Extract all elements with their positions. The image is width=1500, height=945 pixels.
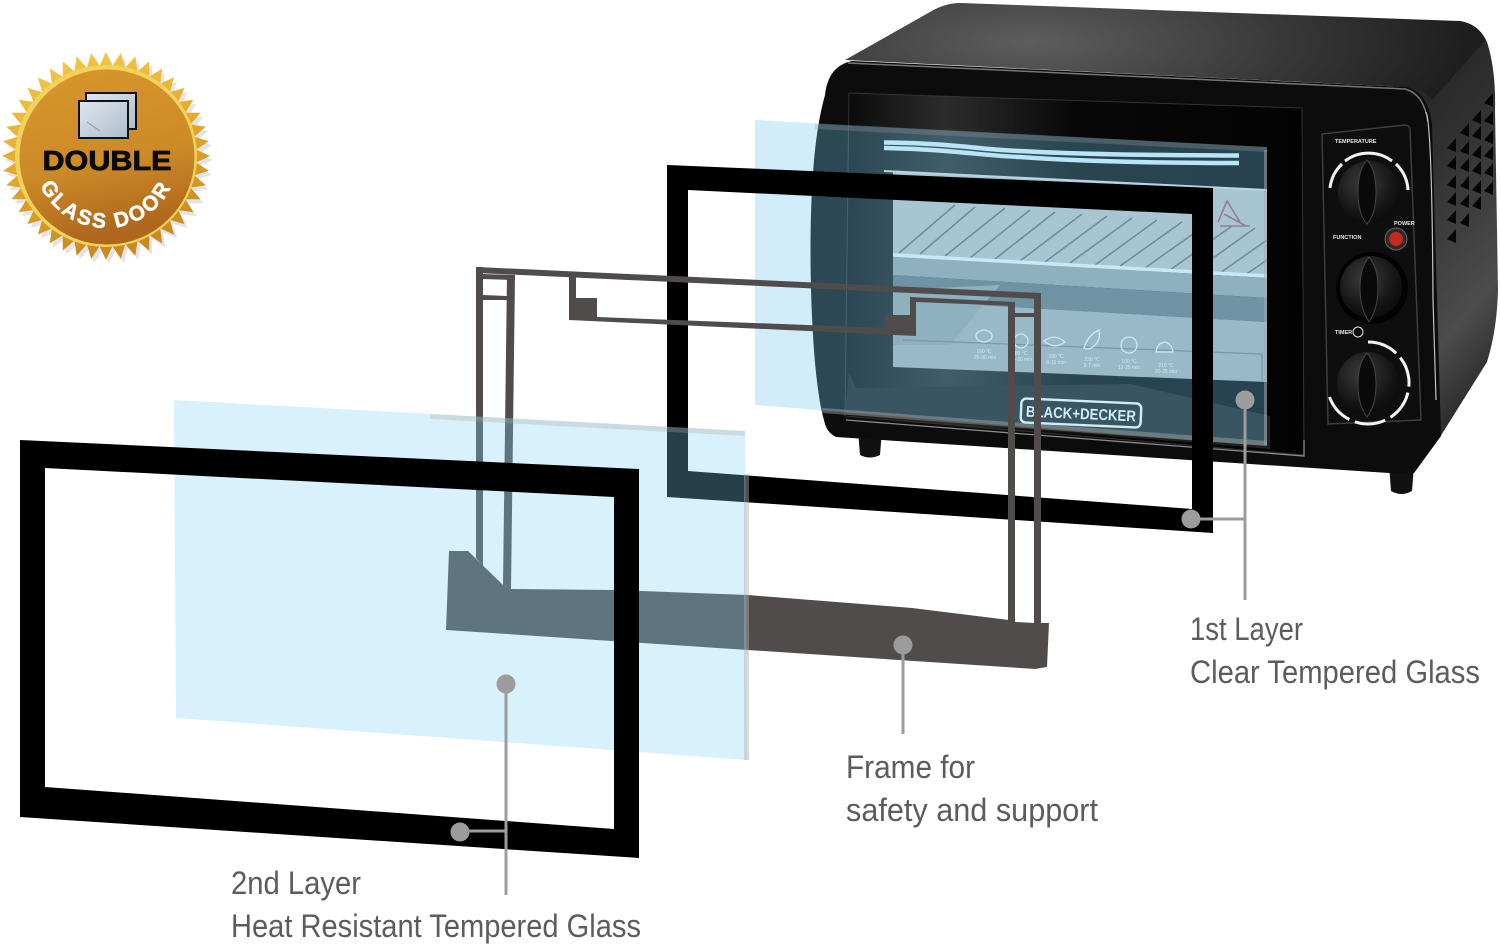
timer icon: [1353, 327, 1363, 337]
temperature dial: [1330, 153, 1408, 224]
oven: [810, 3, 1498, 494]
cooking guide captions: 20-25 min: [1155, 369, 1177, 375]
pointer: 2nd layer: [450, 674, 516, 895]
door lower panel: [845, 372, 1270, 449]
front edge highlights: [848, 63, 1428, 122]
label: 2nd layer: 2nd Layer: [231, 865, 361, 901]
cooking guide captions: 210 °C: [1158, 363, 1174, 369]
power light: [1385, 228, 1407, 250]
label: frame: [846, 749, 1098, 828]
cooking guide captions: 230 °C: [1048, 354, 1064, 360]
label: frame: safety and support: [846, 792, 1098, 828]
frame right uprights and crossbar: [1034, 293, 1041, 625]
label: 1st layer: Clear Tempered Glass: [1190, 654, 1480, 690]
timer label: TIMER: [1335, 330, 1352, 336]
label: frame: Frame for: [846, 749, 975, 785]
oven feet: [858, 430, 1414, 494]
cooking guide captions: 150 °C: [976, 349, 992, 355]
cooking guide captions: 190 °C: [1121, 359, 1137, 365]
badge heading: DOUBLE: [42, 145, 172, 176]
oven side housing: [1380, 21, 1498, 473]
temperature label: TEMPERATURE: [1335, 139, 1377, 145]
cooking guide captions: 25-30 min: [974, 355, 996, 361]
function dial: [1336, 252, 1408, 324]
2nd layer glass pane: [174, 400, 749, 760]
label: 1st layer: [1190, 611, 1480, 690]
vent slots: [1447, 93, 1493, 243]
2nd layer black frame: [20, 440, 639, 858]
frame inner bracket: [569, 273, 1015, 336]
frame outer top rail: [477, 267, 1041, 299]
badge curved text: GLASS DOOR: [42, 181, 172, 228]
1st layer black frame: [667, 165, 1213, 533]
cooking guide captions: 230 °C: [1084, 357, 1100, 363]
cooking guide captions: 20-30 min: [1010, 357, 1032, 363]
1st layer glass pane: [755, 120, 1267, 446]
red rack reflection: [1218, 201, 1250, 226]
label: 2nd layer: [231, 865, 641, 944]
frame left uprights and crossbars: [476, 267, 483, 566]
oven front face: [810, 61, 1441, 473]
wire rack: [893, 205, 1267, 276]
label: 2nd layer: Heat Resistant Tempered Glass: [231, 908, 641, 944]
brand logo: [1021, 398, 1141, 428]
brand logo: BLACK+DECKER: [1026, 404, 1136, 425]
door ledge highlight: [846, 420, 1304, 456]
icon: two glass panes: [79, 93, 136, 138]
cooking guide captions: 3-7 min: [1084, 363, 1101, 369]
upper heating rod: [884, 142, 1239, 163]
pointer: 1st layer: [1182, 390, 1254, 600]
badge starburst: [0, 50, 215, 266]
cooking guide captions: 80 °C: [1015, 351, 1028, 357]
power label: POWER: [1394, 221, 1415, 227]
badge: double glass door: [2, 52, 212, 264]
badge disc: [15, 65, 197, 247]
door window recess: [845, 93, 1304, 455]
cooking guide captions: 8-15 min: [1046, 360, 1066, 366]
cooking guide icons: [976, 330, 1173, 353]
oven interior: [884, 171, 1267, 382]
cooking guide captions: [974, 349, 1177, 375]
timer dial: [1330, 342, 1409, 424]
frame bottom bar: [446, 551, 1049, 669]
oven top surface: [845, 3, 1486, 100]
control panel: [1322, 125, 1421, 424]
label: 1st layer: 1st Layer: [1190, 611, 1303, 647]
function label: FUNCTION: [1333, 235, 1361, 241]
pointer: frame: [894, 636, 912, 734]
cooking guide captions: 12-25 min: [1118, 365, 1140, 371]
support frame: [446, 267, 1049, 669]
